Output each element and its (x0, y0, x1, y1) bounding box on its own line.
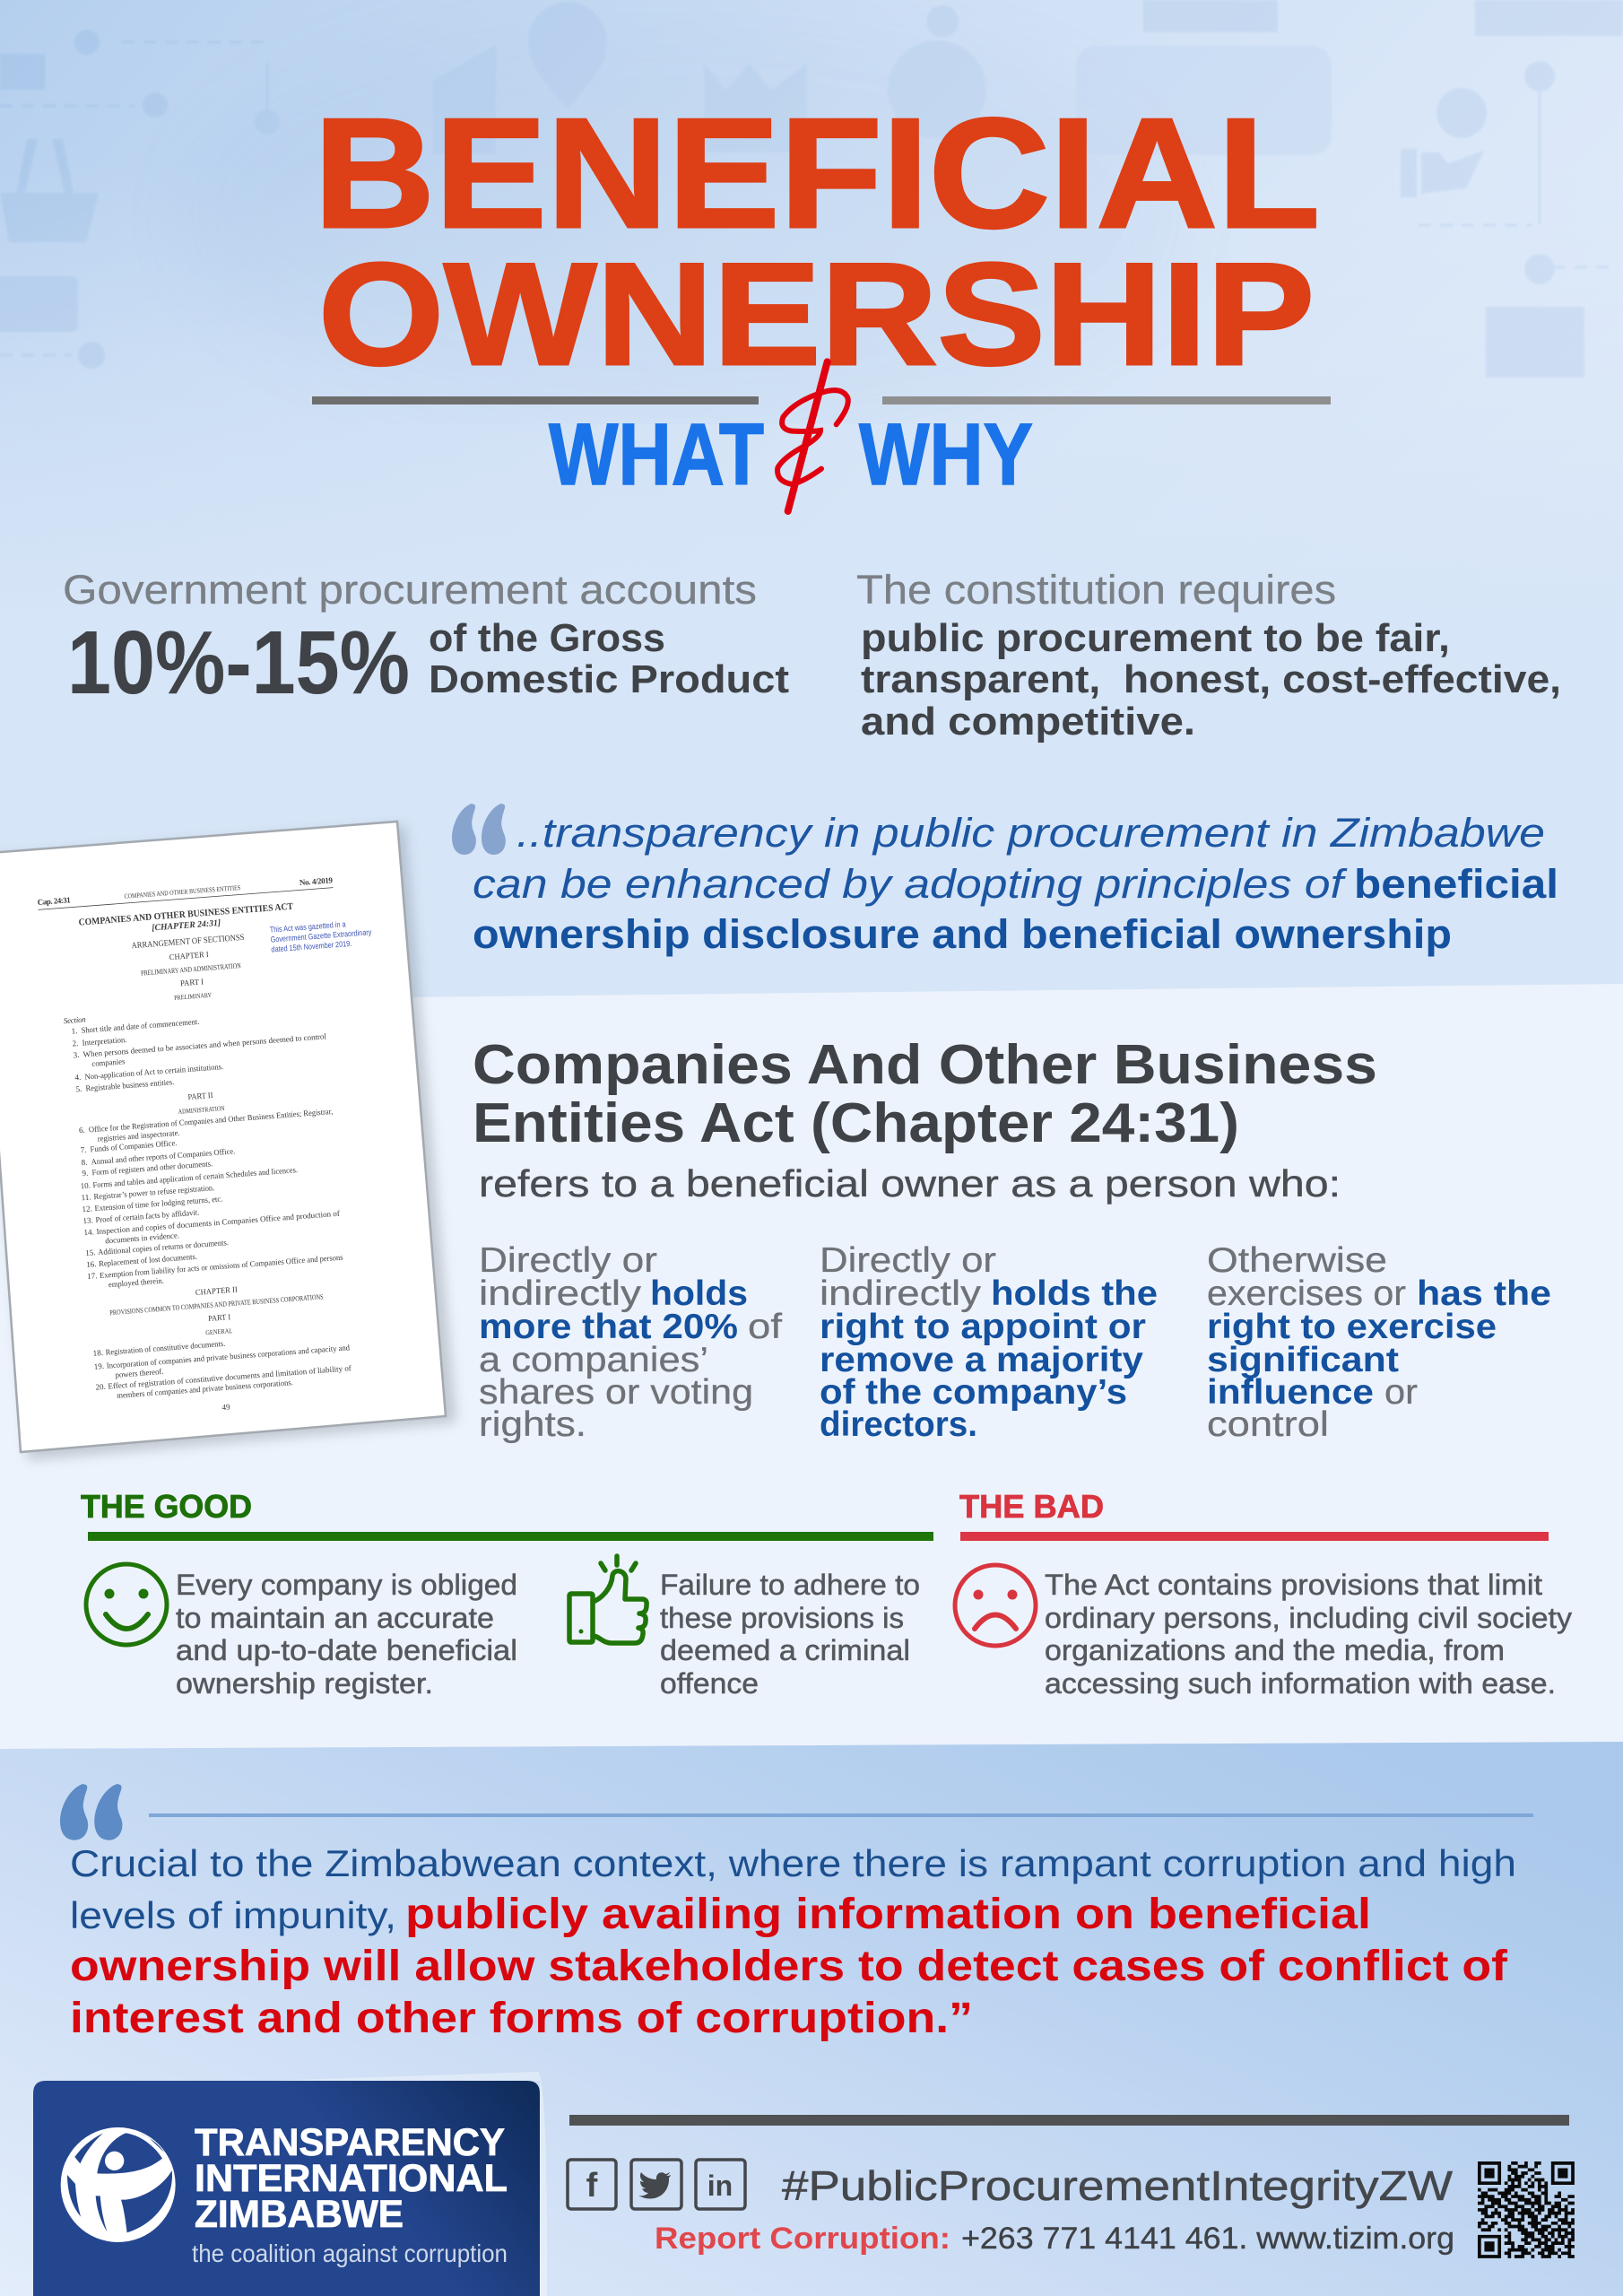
column: 20 percent holding: rights. (479, 1405, 586, 1444)
title (314, 85, 1320, 396)
text: criminal offence: Failure to adhere to (660, 1569, 920, 1601)
column: significant influence: significant (1207, 1341, 1399, 1379)
social icons (568, 2160, 745, 2209)
social icons: f (586, 2167, 598, 2205)
document: Companies Act page: Non-application of Act to certain institutions. (84, 1062, 223, 1082)
document: Companies Act page: 17. (87, 1271, 98, 1281)
document: Companies Act page: [CHAPTER 24:31] (152, 918, 221, 934)
document: Companies Act page: Cap. 24:31 (37, 895, 72, 907)
column: 20 percent holding: Directly or (479, 1241, 657, 1280)
document: Companies Act page: Section (63, 1014, 87, 1025)
column: 20 percent holding: indirectly (479, 1274, 642, 1313)
document: Companies Act page: CHAPTER II (195, 1285, 238, 1297)
text: access limits (1045, 1569, 1572, 1700)
document: Companies Act page: PART I (208, 1312, 230, 1323)
logo panel: Transparency International Zimbabwe (33, 2072, 547, 2296)
document: Companies Act page: 18. (92, 1348, 103, 1358)
document: Companies Act page: COMPANIES AND OTHER BUSINESS ENTITIES (124, 883, 241, 900)
document: Companies Act page: registries and inspectorate. (97, 1128, 180, 1144)
column: right to appoint directors: of the company’s (820, 1373, 1127, 1412)
document: Companies Act page: Registration of constitutive documents. (105, 1339, 226, 1357)
document: Companies Act page: 11. (81, 1192, 91, 1202)
column: right to appoint directors: indirectly (820, 1274, 982, 1313)
heading: the good: THE GOOD (81, 1488, 252, 1525)
constitution requirement: public procurement to be fair, (861, 616, 1450, 660)
document: Companies Act page: 6. (79, 1126, 85, 1135)
corruption quote: interest and other forms of corruption.” (70, 1995, 973, 2042)
column: right to appoint directors: right to appoint or (820, 1308, 1146, 1346)
document: Companies Act page: PROVISIONS COMMON TO COMPANIES AND PRIVATE BUSINESS CORPORATIONS (109, 1292, 324, 1317)
document: Companies Act page: Extension of time for lodging returns, etc. (94, 1194, 223, 1213)
report corruption line: +263 771 4141 461. www.tizim.org (961, 2222, 1454, 2256)
document: Companies Act page: Registrable business entities. (85, 1077, 175, 1093)
text: access limits: accessing such information with ease. (1045, 1667, 1556, 1700)
transparency quote (473, 810, 1558, 957)
constitution requirement: transparent, honest, cost-effective, (861, 657, 1561, 701)
icon: QR code (1478, 2163, 1575, 2257)
document: Companies Act page: PART II (187, 1091, 213, 1101)
stat: procurement share of GDP: Domestic Product (429, 657, 789, 701)
document: Companies Act page: 2. (72, 1039, 79, 1048)
heading: the good (81, 1488, 933, 1541)
document: Companies Act page: 12. (82, 1204, 92, 1213)
corruption quote: ownership will allow stakeholders to detect cases of conflict of (70, 1943, 1508, 1990)
text: criminal offence: offence (660, 1667, 759, 1700)
corruption quote (70, 1842, 1516, 2042)
title: BENEFICIAL (314, 85, 1320, 260)
column: significant influence: right to exercise (1207, 1308, 1497, 1346)
column: right to appoint directors (820, 1241, 1158, 1444)
document: Companies Act page: Interpretation. (82, 1035, 127, 1048)
text: criminal offence (660, 1569, 920, 1700)
document: Companies Act page: dated 15th November 2019. (271, 939, 352, 954)
document: Companies Act page: GENERAL (205, 1326, 233, 1336)
text: criminal offence: deemed a criminal (660, 1634, 910, 1666)
column: 20 percent holding: a companies’ (479, 1341, 708, 1379)
document: Companies Act page: members of companies and private business corporations. (117, 1378, 293, 1400)
document: Companies Act page: Forms and tables and application of certain Schedules and licences. (92, 1165, 298, 1189)
heading: the bad: THE BAD (959, 1488, 1104, 1525)
text: access limits: ordinary persons, including civil society (1045, 1602, 1572, 1634)
social icons: in (707, 2170, 733, 2202)
stat: procurement share of GDP: 10%-15% (67, 613, 410, 713)
column: right to appoint directors: remove a majority (820, 1341, 1143, 1379)
document: Companies Act page: 16. (86, 1259, 97, 1269)
text: criminal offence: these provisions is (660, 1602, 904, 1634)
quote rule (149, 1813, 1533, 1817)
document: Companies Act page: Replacement of lost documents. (99, 1252, 197, 1268)
document: Companies Act page: 8. (81, 1158, 88, 1167)
document: Companies Act page: documents in evidence. (105, 1231, 179, 1245)
document: Companies Act page: 49 (221, 1402, 230, 1412)
document: Companies Act page: 5. (75, 1084, 82, 1093)
text: access limits: The Act contains provisions that limit (1045, 1569, 1542, 1601)
corruption quote: Crucial to the Zimbabwean context, where there is rampant corruption and high (70, 1842, 1516, 1884)
document: Companies Act page: 13. (82, 1215, 93, 1225)
document: Companies Act page: COMPANIES AND OTHER BUSINESS ENTITIES ACT (78, 902, 293, 928)
logo wordmark: ZIMBABWE (195, 2193, 404, 2236)
document: Companies Act page: Effect of registration of constitutive documents and limitation of liability of (108, 1363, 352, 1391)
column: significant influence: exercises or (1207, 1274, 1406, 1313)
transparency quote: ownership disclosure and beneficial ownership (473, 911, 1452, 957)
text: register obligation: ownership register. (176, 1667, 433, 1700)
document: Companies Act page: CHAPTER I (169, 950, 209, 961)
document: Companies Act page: When persons deemed to be associates and when persons deemed to control (82, 1031, 327, 1059)
column: 20 percent holding: more that 20% (479, 1308, 738, 1346)
document: Companies Act page: Office for the Registration of Companies and Other Business Entities; Registrar, (89, 1107, 334, 1134)
document: Companies Act page: Short title and date of commencement. (81, 1017, 200, 1035)
column: significant influence: or (1384, 1373, 1418, 1412)
footer rule (569, 2115, 1569, 2126)
document: Companies Act page: 3. (73, 1050, 80, 1059)
transparency quote: can be enhanced by adopting principles of (473, 861, 1348, 907)
document: Companies Act page: powers thereof. (115, 1367, 164, 1379)
column: right to appoint directors: Directly or (820, 1241, 996, 1280)
document: Companies Act page: Funds of Companies Office. (90, 1138, 178, 1153)
bottom blue band (0, 1742, 1623, 2296)
document: Companies Act page: PART I (180, 977, 204, 987)
document: Companies Act page: ARRANGEMENT OF SECTIONSS (131, 934, 245, 951)
text: register obligation: Every company is obliged (176, 1569, 517, 1601)
document: Companies Act page: 7. (80, 1145, 87, 1154)
document: Companies Act page: Exemption from liability for acts or omissions of Companies Office and persons (100, 1253, 343, 1280)
constitution requirement: and competitive. (861, 700, 1195, 744)
hashtag: #PublicProcurementIntegrityZW (782, 2162, 1454, 2209)
quote mark: top (452, 804, 506, 855)
document: Companies Act page: PRELIMINARY AND ADMINISTRATION (141, 961, 241, 978)
transparency quote: beneficial (1354, 861, 1558, 907)
subtitle: what and why (312, 361, 1331, 511)
constitution requirement (856, 567, 1561, 744)
document: Companies Act page: Government Gazette Extraordinary (270, 927, 372, 944)
text: access limits: organizations and the media, from (1045, 1634, 1505, 1666)
document: Companies Act page: Annual and other reports of Companies Office. (91, 1146, 236, 1166)
document: Companies Act page: Registrar’s power to refuse registration. (93, 1183, 215, 1201)
column: right to appoint directors: directors. (820, 1405, 977, 1444)
quote mark: bottom (60, 1784, 122, 1840)
column: significant influence: Otherwise (1207, 1241, 1387, 1280)
document: Companies Act page: 15. (85, 1248, 96, 1257)
column: 20 percent holding (479, 1241, 782, 1444)
background icons (0, 0, 1623, 422)
document: Companies Act page: PRELIMINARY (174, 991, 213, 1002)
document: Companies Act page: 1. (71, 1026, 78, 1036)
document: Companies Act page: Inspection and copies of documents in Companies Office and production of (96, 1209, 340, 1236)
logo wordmark: TRANSPARENCY (195, 2121, 505, 2164)
heading: Companies Act: Companies And Other Business (473, 1034, 1377, 1096)
column: significant influence: has the (1417, 1274, 1551, 1313)
icon: smiley (86, 1564, 167, 1645)
document: Companies Act page: companies (91, 1057, 126, 1068)
column: significant influence: control (1207, 1405, 1329, 1444)
icon: thumbs up (569, 1556, 647, 1643)
text: register obligation: and up-to-date beneficial (176, 1634, 517, 1666)
title: OWNERSHIP (318, 233, 1315, 396)
text: register obligation (176, 1569, 517, 1700)
document: Companies Act page: ADMINISTRATION (178, 1104, 225, 1116)
document: Companies Act page: Form of registers and other documents. (91, 1159, 213, 1177)
column: significant influence: influence (1207, 1373, 1374, 1412)
heading: Companies Act (473, 1034, 1377, 1205)
icon: TI globe (61, 2127, 176, 2242)
logo tagline: the coalition against corruption (192, 2239, 508, 2267)
column: 20 percent holding: of (748, 1308, 782, 1346)
subtitle: what and why: WHY (859, 405, 1033, 503)
document: Companies Act page: Incorporation of companies and private business corporations and capacity and (106, 1343, 351, 1370)
document: Companies Act page: 14. (83, 1227, 94, 1237)
light content band (0, 984, 1623, 1749)
report corruption line (655, 2222, 1454, 2256)
heading: the bad (959, 1488, 1549, 1541)
document: Companies Act page: No. 4/2019 (299, 875, 334, 887)
document: Companies Act page: 10. (80, 1180, 91, 1190)
logo wordmark: INTERNATIONAL (195, 2157, 508, 2200)
document: Companies Act page (0, 822, 456, 1460)
document: Companies Act page: Additional copies of returns or documents. (98, 1238, 229, 1257)
document: Companies Act page: Proof of certain facts by affidavit. (95, 1207, 200, 1224)
document: Companies Act page: This Act was gazetted in a (269, 919, 346, 935)
constitution requirement: The constitution requires (856, 567, 1336, 613)
corruption quote: levels of impunity, (70, 1894, 396, 1936)
stat: procurement share of GDP (63, 567, 789, 713)
column: 20 percent holding: shares or voting (479, 1373, 753, 1412)
text: register obligation: to maintain an accurate (176, 1602, 494, 1634)
column: right to appoint directors: holds the (991, 1274, 1158, 1313)
column: 20 percent holding: holds (650, 1274, 748, 1313)
heading: Companies Act: Entities Act (Chapter 24:31) (473, 1092, 1239, 1154)
subtitle: what and why: WHAT (549, 405, 764, 503)
document: Companies Act page: 4. (74, 1073, 82, 1082)
document: Companies Act page: employed therein. (108, 1276, 164, 1289)
report corruption line: Report Corruption: (655, 2222, 950, 2256)
heading: Companies Act: refers to a beneficial owner as a person who: (479, 1162, 1341, 1205)
document: Companies Act page: 19. (93, 1361, 104, 1371)
stat: procurement share of GDP: Government procurement accounts (63, 567, 757, 613)
stat: procurement share of GDP: of the Gross (429, 616, 665, 660)
column: significant influence (1207, 1241, 1551, 1444)
icon: sad face (955, 1565, 1036, 1646)
logo wordmark (195, 2121, 508, 2236)
document: Companies Act page: 20. (95, 1382, 106, 1392)
transparency quote: ..transparency in public procurement in Zimbabwe (516, 810, 1545, 856)
corruption quote: publicly availing information on beneficial (405, 1891, 1371, 1938)
document: Companies Act page: 9. (82, 1169, 89, 1178)
